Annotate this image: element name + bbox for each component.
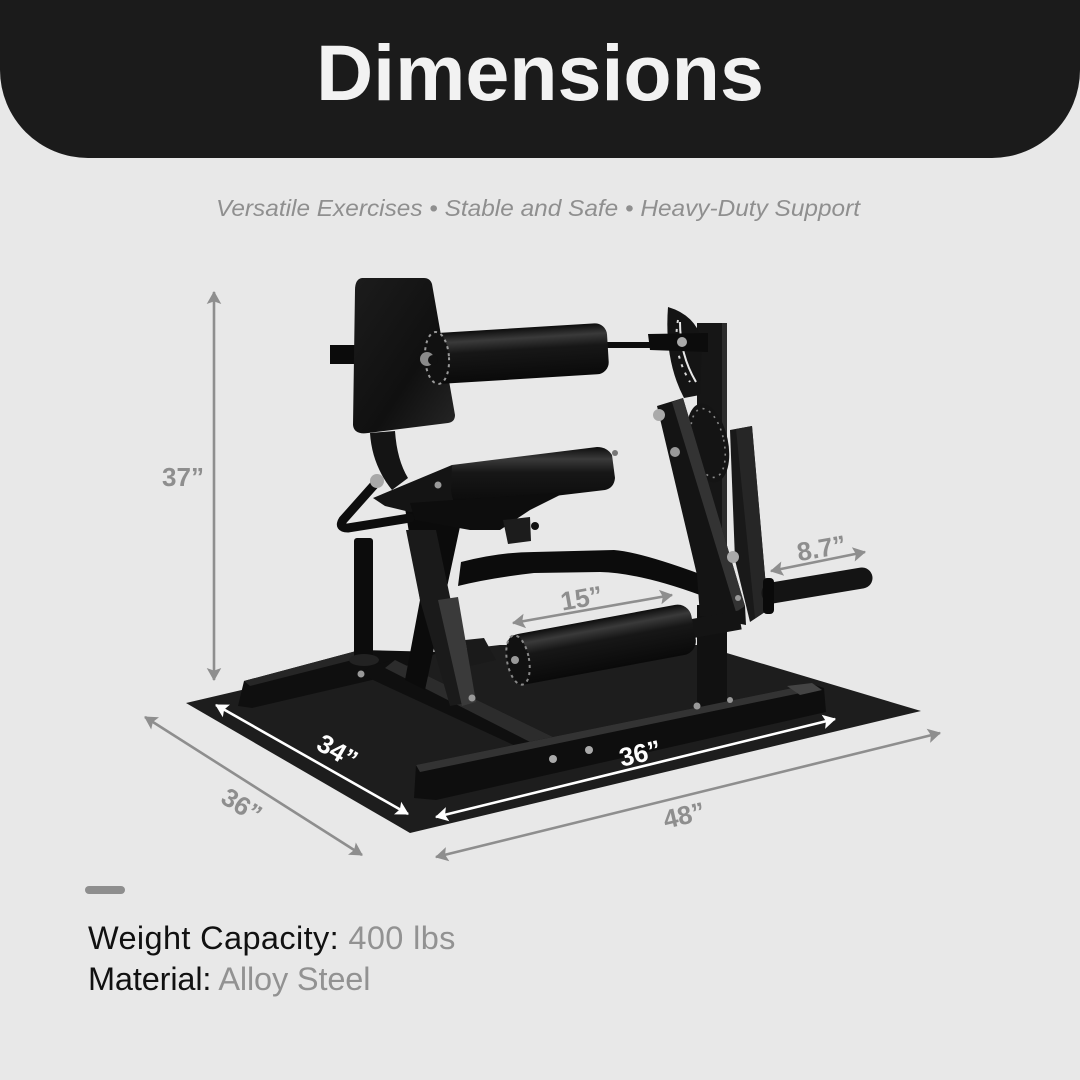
specifications: Weight Capacity: 400 lbs — [88, 920, 456, 956]
arrow: 36 frame width — [436, 719, 835, 817]
pivot arm — [657, 398, 746, 625]
top rod and bracket — [606, 333, 708, 352]
arrow: 36 frame width: 36” — [616, 734, 664, 773]
arrow: 15 roller length: 15” — [558, 580, 605, 617]
rear beam — [238, 650, 440, 708]
weight post — [354, 538, 373, 658]
arrow: 48 mat width: 48” — [660, 796, 708, 835]
upper disc — [667, 307, 702, 398]
seat back tab — [330, 345, 356, 364]
lower roller — [503, 602, 740, 687]
arch brace — [458, 550, 700, 595]
seat bracket — [410, 492, 566, 544]
back support — [370, 431, 408, 490]
rear foot — [465, 638, 496, 666]
arrow: 48 mat width — [436, 733, 940, 857]
specifications — [88, 920, 456, 997]
base bolts — [549, 755, 557, 763]
header band — [0, 0, 1080, 158]
arrow: 8.7 peg length: 8.7” — [795, 529, 848, 567]
lever peg — [763, 578, 862, 614]
handle bar — [341, 484, 410, 528]
lower disc — [680, 400, 736, 486]
arrow: 15 roller length — [513, 580, 672, 623]
front post — [697, 605, 727, 710]
title: Dimensions — [316, 28, 764, 117]
specifications: Material: Alloy Steel — [88, 961, 370, 997]
front base beam — [414, 684, 826, 800]
arrow: 36 mat depth: 36” — [216, 782, 267, 829]
floor mat — [186, 645, 921, 833]
rear block — [730, 426, 768, 622]
arrow: 34 frame depth — [216, 705, 408, 814]
back pad — [353, 278, 455, 433]
arrow: 37 height: 37” — [162, 462, 204, 492]
machine — [238, 278, 862, 800]
arrow: 8.7 peg length — [771, 529, 865, 571]
seat roller — [373, 447, 618, 512]
subtitle: Versatile Exercises • Stable and Safe • Heavy-Duty Support — [216, 195, 862, 221]
arrow: 34 frame depth: 34” — [312, 728, 363, 775]
accent bar — [85, 886, 125, 894]
upright — [697, 323, 727, 560]
cross beam — [360, 660, 555, 748]
scissor support — [405, 508, 464, 690]
top roller — [420, 323, 609, 385]
arrow: 36 mat depth — [145, 717, 362, 855]
